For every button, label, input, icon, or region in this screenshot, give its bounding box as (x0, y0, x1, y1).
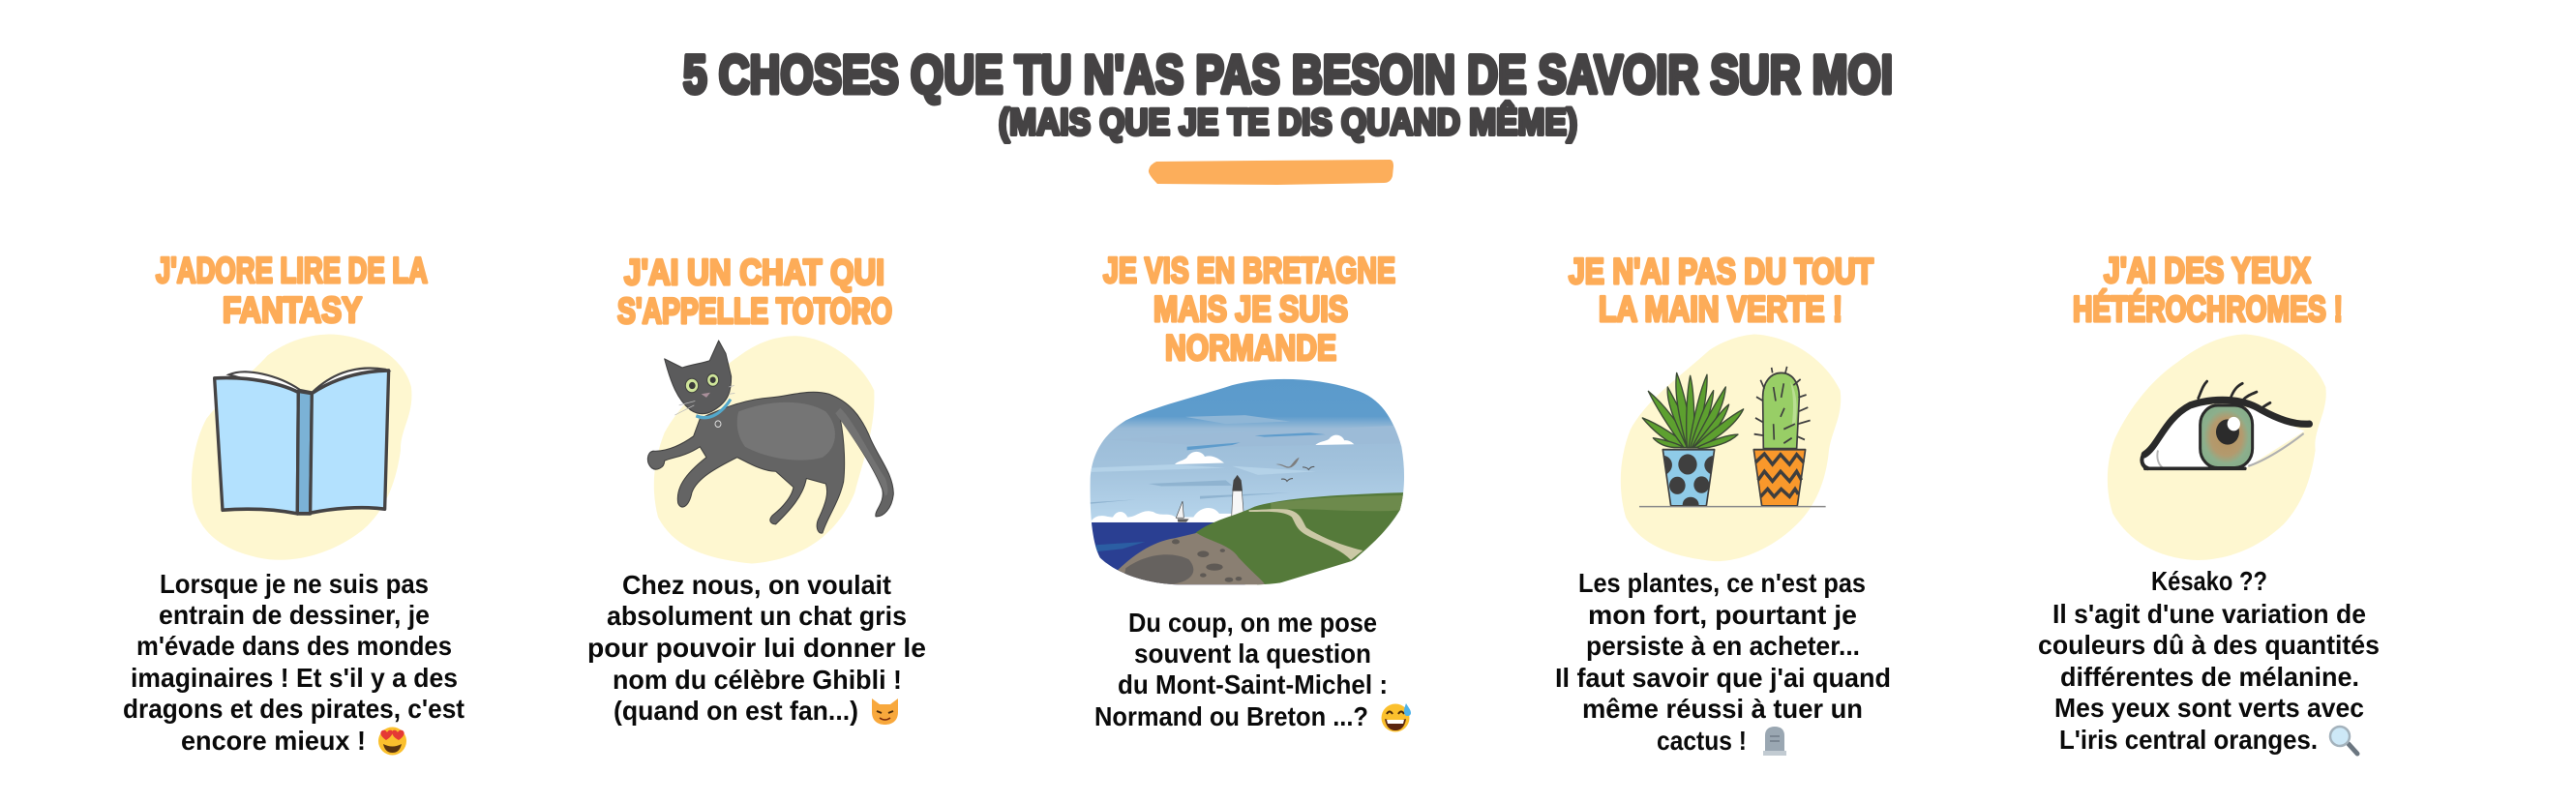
text: lighthouse: Normand ou Breton ...? (1094, 701, 1368, 731)
panel: eye (2038, 251, 2380, 755)
text: cat: Chez nous, on voulait (622, 570, 891, 600)
heading: eye: J'AI DES YEUX (2104, 251, 2311, 290)
panel: plants (1555, 252, 1891, 756)
panel: cat (587, 253, 926, 726)
illustration: aloe and cactus on shelf (1621, 334, 1841, 561)
text: eye: Mes yeux sont verts avec (2054, 693, 2364, 723)
icon: magnifying glass emoji (2330, 727, 2357, 754)
subtitle: (MAIS QUE JE TE DIS QUAND MÊME) (999, 101, 1577, 143)
heading: fantasy: FANTASY (223, 290, 362, 330)
text: eye: couleurs dû à des quantités (2038, 630, 2380, 660)
heading: cat (617, 253, 892, 331)
icon: cat emoji (872, 699, 898, 725)
text: cat: pour pouvoir lui donner le (587, 633, 926, 663)
heading: cat: J'AI UN CHAT QUI (624, 253, 884, 292)
text: eye: différentes de mélanine. (2060, 662, 2359, 692)
heading: plants (1569, 252, 1873, 329)
cactus (1754, 367, 1811, 449)
text: eye: Késako ?? (2151, 566, 2267, 596)
text: cat: absolument un chat gris (607, 601, 907, 631)
heading: plants: LA MAIN VERTE ! (1599, 289, 1842, 329)
text: fantasy: imaginaires ! Et s'il y a des (131, 663, 458, 693)
text: fantasy: encore mieux ! (181, 726, 366, 756)
icon: headstone emoji (1763, 727, 1786, 756)
text: plants: cactus ! (1657, 726, 1747, 756)
text: plants (1555, 568, 1891, 756)
text: plants: Il faut savoir que j'ai quand (1555, 663, 1891, 693)
heading: lighthouse: NORMANDE (1165, 328, 1336, 368)
text: cat: (quand on est fan...) (614, 696, 858, 726)
text: plants: persiste à en acheter... (1586, 631, 1860, 661)
illustration: grey cat on yellow blob (647, 336, 893, 564)
illustration: open book on yellow blob (192, 334, 411, 560)
title: 5 CHOSES QUE TU N'AS PAS BESOIN DE SAVOIR SUR MOI (683, 44, 1893, 104)
zigzag pot (1753, 450, 1806, 506)
panel: fantasy (123, 251, 464, 756)
panel: lighthouse (1084, 251, 1411, 731)
heading: eye: HÉTÉROCHROMES ! (2073, 289, 2343, 329)
icon: sweat grin emoji (1382, 703, 1411, 731)
heading: cat: S'APPELLE TOTORO (617, 291, 892, 331)
text: eye (2038, 566, 2380, 755)
illustration: Brittany coast landscape (1084, 372, 1410, 585)
heading: plants: JE N'AI PAS DU TOUT (1569, 252, 1873, 291)
heading: fantasy: J'ADORE LIRE DE LA (156, 251, 428, 290)
heading: lighthouse: MAIS JE SUIS (1153, 289, 1348, 329)
heading: eye (2073, 251, 2343, 329)
text: fantasy: m'évade dans des mondes (136, 631, 452, 661)
text: fantasy: entrain de dessiner, je (159, 600, 430, 630)
heading: lighthouse: JE VIS EN BRETAGNE (1103, 251, 1395, 290)
aloe plant (1642, 372, 1744, 449)
text: eye: Il s'agit d'une variation de (2052, 599, 2366, 629)
text: fantasy: dragons et des pirates, c'est (123, 694, 464, 724)
polka dot pot (1662, 450, 1715, 506)
text: fantasy (123, 569, 464, 756)
illustration: green and orange eye (2108, 334, 2326, 560)
text: lighthouse: souvent la question (1134, 639, 1371, 669)
icon: heart eyes emoji (378, 728, 406, 755)
text: plants: même réussi à tuer un (1582, 694, 1863, 724)
text: eye: L'iris central oranges. (2059, 725, 2318, 755)
text: fantasy: Lorsque je ne suis pas (160, 569, 429, 599)
text: lighthouse: Du coup, on me pose (1128, 608, 1377, 638)
text: cat (587, 570, 926, 726)
heading: lighthouse (1103, 251, 1395, 368)
orange brush underline (1149, 160, 1393, 185)
heading: fantasy (156, 251, 428, 330)
text: cat: nom du célèbre Ghibli ! (613, 665, 902, 695)
text: lighthouse: du Mont-Saint-Michel : (1118, 669, 1388, 699)
text: lighthouse (1094, 608, 1388, 731)
text: plants: Les plantes, ce n'est pas (1578, 568, 1866, 598)
text: plants: mon fort, pourtant je (1588, 600, 1857, 630)
